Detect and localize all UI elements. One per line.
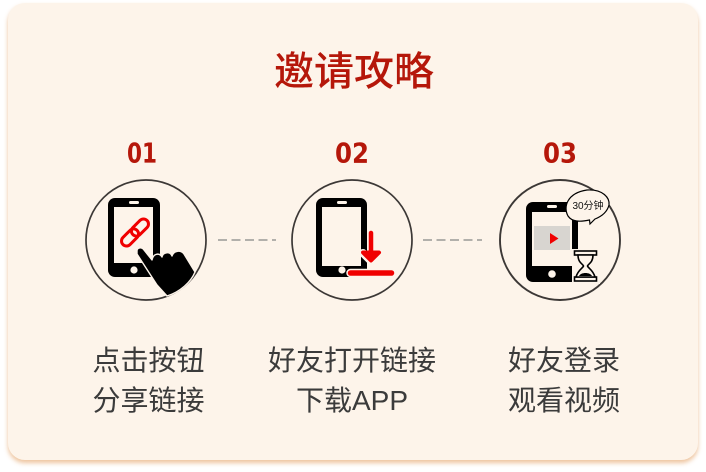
caption: step 3 bbox=[508, 345, 620, 416]
caption: step 2: 下载APP bbox=[296, 385, 408, 416]
title: 邀请攻略 bbox=[274, 39, 434, 97]
video player bbox=[534, 226, 570, 250]
step number 01: 01 bbox=[127, 136, 157, 170]
caption: step 2 bbox=[268, 345, 436, 416]
icon: phone with video, timer bubble and hourglass bbox=[500, 180, 620, 300]
icon: phone with download arrow bbox=[292, 180, 412, 300]
caption: step 1: 分享链接 bbox=[92, 385, 205, 416]
step number 03: 03 bbox=[543, 136, 577, 170]
hourglass bbox=[572, 249, 600, 284]
icon: phone with link and tapping hand bbox=[86, 180, 206, 300]
caption: step 2: 好友打开链接 bbox=[268, 345, 436, 376]
step number 02: 02 bbox=[335, 136, 369, 170]
caption: step 1 bbox=[92, 345, 205, 416]
speech bubble: 30 minutes: 30分钟 bbox=[572, 199, 604, 212]
caption: step 1: 点击按钮 bbox=[92, 345, 205, 376]
caption: step 3: 观看视频 bbox=[508, 385, 620, 416]
connector dashes 2 bbox=[423, 239, 482, 241]
caption: step 3: 好友登录 bbox=[508, 345, 620, 376]
connector dashes 1 bbox=[218, 239, 276, 241]
